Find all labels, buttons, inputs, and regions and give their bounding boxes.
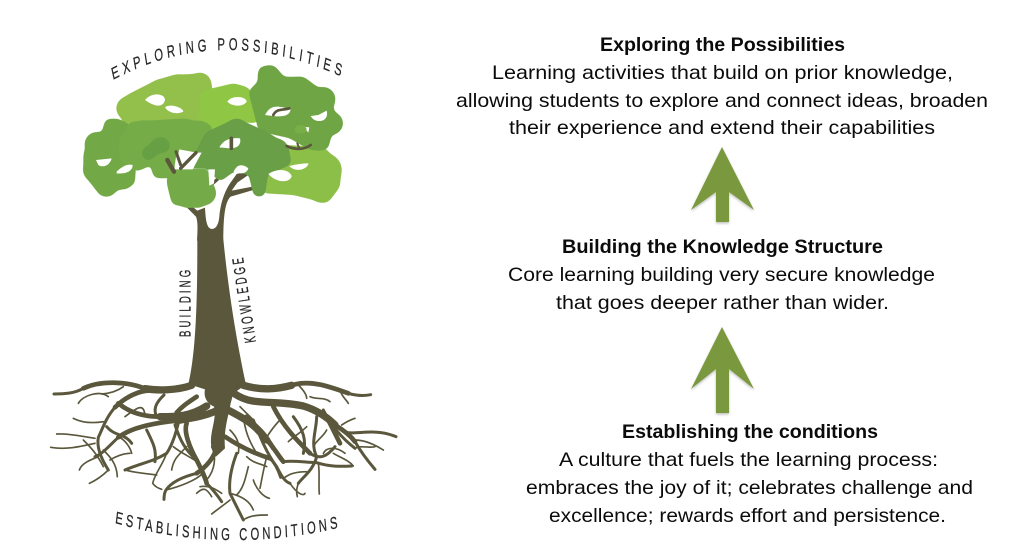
body line 2: embraces the joy of it; celebrates challenge and <box>526 477 973 499</box>
trunk label: knowledge: KNOWLEDGE <box>229 256 260 344</box>
tree canopy <box>84 67 342 207</box>
illustration: tree <box>50 38 398 540</box>
roots <box>51 383 396 520</box>
body line 3: excellence; rewards effort and persistence. <box>549 505 946 527</box>
branches seen through gaps <box>167 108 311 172</box>
small leaf cluster <box>294 126 307 132</box>
curved label: exploring possibilities: EXPLORING POSSIBILITIES <box>111 38 342 80</box>
body line 1: A culture that fuels the learning process: <box>559 449 938 471</box>
canopy: centre dark crown <box>190 120 290 195</box>
heading: exploring the possibilities: Exploring the Possibilities <box>600 34 845 56</box>
canopy: centre left crown <box>120 120 212 177</box>
canopy: lower right crown <box>260 147 340 202</box>
arrow: lower <box>691 327 754 413</box>
canopy: bottom crown <box>168 170 215 207</box>
heading: building the knowledge structure: Building the Knowledge Structure <box>562 236 883 258</box>
canopy: inner shade <box>143 138 170 160</box>
canopy: far left crown <box>84 120 135 195</box>
body line 3: their experience and extend their capabilities <box>509 117 935 139</box>
curved label: establishing conditions: ESTABLISHING CONDITIONS <box>116 512 338 540</box>
trunk <box>188 239 246 457</box>
canopy: bright centre crown <box>200 85 262 130</box>
canopy gaps <box>96 94 327 186</box>
trunk label: building: BUILDING <box>176 270 194 337</box>
body line 2: that goes deeper rather than wider. <box>556 292 889 314</box>
text block: exploring the possibilities <box>456 34 988 139</box>
canopy: light left crown <box>118 74 211 130</box>
body line 1: Learning activities that build on prior knowledge, <box>492 62 953 84</box>
canopy: dark upper right crown <box>250 67 342 149</box>
text block: establishing the conditions <box>526 421 973 527</box>
tree trunk top and branches <box>185 170 253 241</box>
heading: establishing the conditions: Establishing the conditions <box>622 421 878 443</box>
body line 1: Core learning building very secure knowledge <box>508 264 935 286</box>
arrow: upper <box>691 147 754 222</box>
body line 2: allowing students to explore and connect ideas, broaden <box>456 90 988 112</box>
text block: building the knowledge structure <box>508 236 935 314</box>
